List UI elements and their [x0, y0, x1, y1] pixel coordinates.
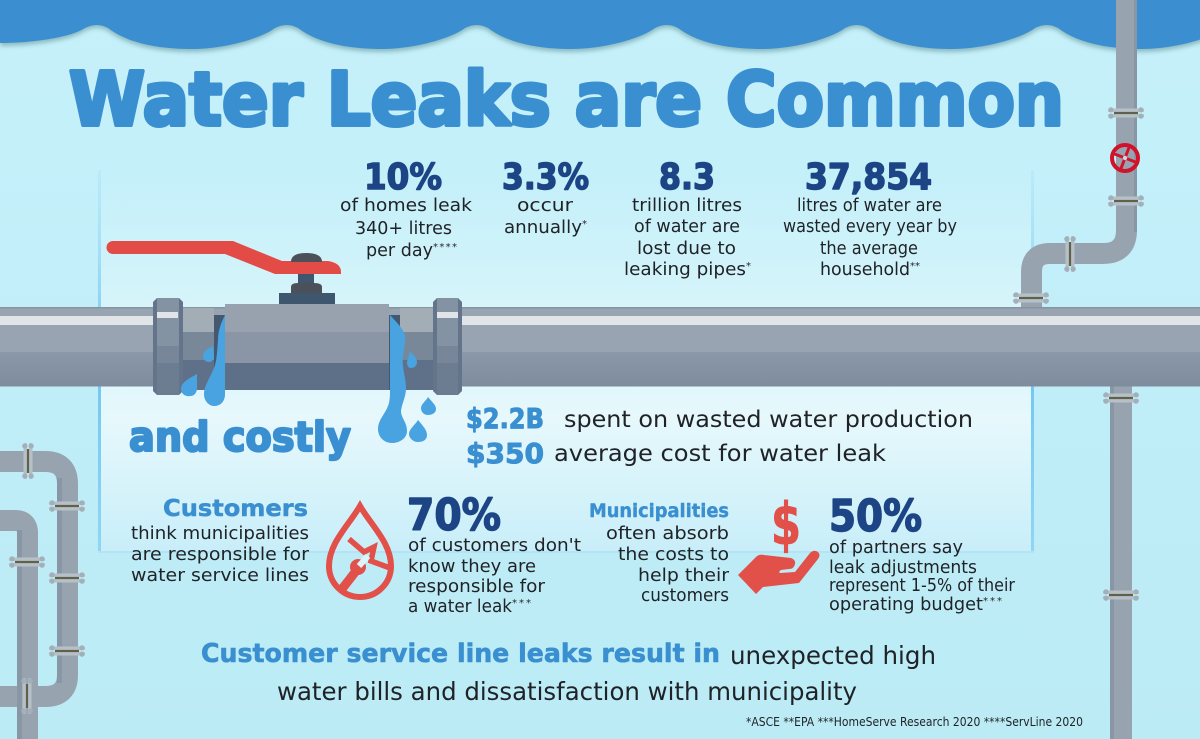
valve body	[225, 304, 389, 390]
stat: 37,854 litres: litres of water are	[797, 196, 942, 216]
stat: 70% customers: know they are	[408, 557, 536, 577]
stat: 50% partners: represent 1-5% of their	[829, 576, 1016, 596]
stat: 70% customers: responsible for	[408, 577, 546, 597]
stat: 8.3 trillion litres: *	[746, 261, 751, 272]
stat: 10% of homes: per day	[366, 241, 433, 261]
cost lines: average cost for water leak	[554, 441, 887, 467]
left collar	[153, 298, 183, 395]
title: Water Leaks are Common	[69, 57, 1064, 143]
conclusion statement: water bills and dissatisfaction with municipality	[277, 677, 857, 706]
ball valve	[107, 241, 462, 395]
municipalities text: the costs to	[618, 545, 729, 565]
cost lines: $350	[466, 437, 544, 470]
cost lines: spent on wasted water production	[564, 407, 973, 433]
stat: 70% customers: 70%	[407, 490, 501, 541]
customers text: Customers	[163, 496, 308, 522]
stat: 50% partners: ***	[983, 596, 1002, 607]
municipalities text	[589, 500, 730, 606]
pipes: left side	[0, 443, 85, 739]
stat: 70% customers: ***	[512, 598, 531, 609]
municipalities text: help their	[638, 566, 730, 586]
stat: 8.3 trillion litres: of water are	[634, 217, 740, 237]
customers text	[131, 496, 310, 586]
stat: 37,854 litres: the average	[820, 239, 918, 259]
heading: and costly: and costly	[129, 413, 351, 461]
stat: 50% partners: operating budget	[829, 595, 983, 615]
stat: 70% customers	[407, 490, 581, 617]
icon: red wheel valve	[1112, 145, 1138, 171]
stat: 37,854 litres: **	[910, 261, 920, 272]
cost lines: $2.2B	[466, 402, 544, 435]
icon: drop with wrench and crack	[329, 506, 391, 597]
stat: 37,854 litres: wasted every year by	[783, 217, 957, 237]
pipes: right side with wheel valve	[1013, 0, 1144, 739]
right collar	[433, 298, 462, 395]
stat: 3.3% annually	[502, 157, 589, 238]
icon: hand holding dollar: $	[771, 490, 801, 558]
municipalities text: often absorb	[606, 524, 729, 544]
stat: 10% of homes	[340, 157, 473, 261]
municipalities text: Municipalities	[589, 500, 729, 522]
stat: 10% of homes: of homes leak	[340, 196, 473, 216]
stat: 8.3 trillion litres: leaking pipes	[624, 260, 746, 280]
stat: 10% of homes: 340+ litres	[355, 219, 452, 239]
stat: 10% of homes: 10%	[364, 157, 442, 198]
municipalities text: customers	[641, 586, 729, 606]
customers text: water service lines	[131, 566, 309, 586]
stat: 50% partners: 50%	[829, 491, 922, 542]
stat: 8.3 trillion litres	[624, 157, 751, 280]
stat: 10% of homes: ****	[433, 242, 457, 253]
stat: 50% partners	[829, 491, 1016, 615]
stat: 8.3 trillion litres: 8.3	[659, 157, 715, 198]
footnote sources: *ASCE **EPA ***HomeServe Research 2020 ****ServLine 2020	[746, 714, 1083, 729]
stat: 8.3 trillion litres: trillion litres	[632, 196, 742, 216]
stat: 8.3 trillion litres: lost due to	[637, 239, 736, 259]
icon: hand holding dollar	[738, 490, 820, 594]
stat: 3.3% annually: *	[582, 219, 587, 230]
customers text: think municipalities	[131, 524, 309, 544]
valve stem	[279, 253, 335, 304]
stat: 37,854 litres	[783, 157, 957, 280]
conclusion statement: unexpected high	[730, 641, 936, 670]
stat: 70% customers: a water leak	[408, 597, 513, 617]
stat: 50% partners: of partners say	[829, 538, 963, 558]
cost lines	[466, 402, 973, 470]
water leaks and drops	[181, 315, 436, 443]
stat: 3.3% annually: occur	[517, 196, 574, 216]
stat: 3.3% annually: annually	[504, 218, 582, 238]
valve handle	[107, 241, 341, 274]
stat: 3.3% annually: 3.3%	[502, 157, 589, 198]
main horizontal pipe	[0, 307, 1200, 386]
water clouds at top	[0, 0, 1200, 49]
conclusion statement	[201, 639, 936, 706]
stat: 37,854 litres: household	[820, 260, 910, 280]
stat: 70% customers: of customers don't	[408, 536, 581, 556]
customers text: are responsible for	[131, 545, 310, 565]
stat: 37,854 litres: 37,854	[805, 157, 932, 198]
stat: 50% partners: leak adjustments	[829, 558, 977, 578]
conclusion statement: Customer service line leaks result in	[201, 639, 720, 669]
panel: lighter content area	[98, 170, 1034, 553]
valve connectors	[183, 308, 433, 390]
